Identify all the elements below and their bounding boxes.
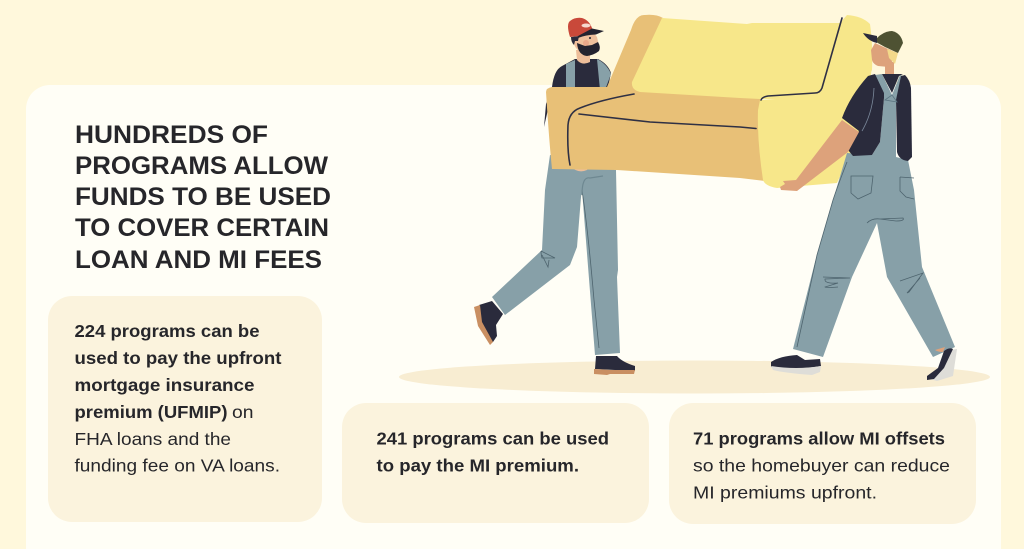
left mover trousers: [492, 155, 620, 355]
left mover hair: [571, 36, 579, 45]
left mover back boot: [479, 301, 503, 342]
title: TO COVER CERTAIN: [75, 214, 329, 242]
left mover hand: [570, 166, 590, 171]
card: 224 programs: used to pay the upfront: [74, 348, 282, 368]
right mover overalls: [793, 74, 955, 357]
right mover arm: [780, 120, 859, 191]
card: 224 programs: mortgage insurance: [74, 375, 255, 395]
card: 71 programs: so the homebuyer can reduce: [693, 456, 950, 476]
left mover overall straps: [566, 59, 611, 90]
card: 241 programs: to pay the MI premium.: [376, 456, 579, 476]
illustration: left mover: [474, 18, 635, 375]
left mover face: [574, 32, 599, 54]
left mover cap: [568, 18, 594, 37]
right mover left shoe: [771, 355, 821, 368]
sofa tan body: [546, 15, 765, 181]
title: HUNDREDS OF: [75, 121, 268, 149]
title: PROGRAMS ALLOW: [75, 152, 328, 180]
right mover cap: [876, 31, 903, 53]
sofa back cushion: [632, 15, 872, 100]
card: 71 programs: [669, 403, 976, 524]
sofa seam lines: [568, 94, 634, 165]
card: 241 programs: [342, 403, 649, 523]
card: 224 programs: [48, 296, 322, 522]
title: [75, 121, 331, 274]
card: 71 programs: 71 programs allow MI offsets: [693, 428, 945, 448]
sofa right arm: [758, 65, 872, 188]
left mover upper body: [544, 59, 611, 127]
right mover pockets and creases: [797, 162, 923, 347]
title: FUNDS TO BE USED: [75, 183, 331, 211]
card: 224 programs: FHA loans and the: [74, 429, 231, 449]
left mover neck: [576, 50, 590, 64]
right mover strap buckle: [885, 95, 897, 102]
right mover neck: [885, 62, 894, 75]
left mover front boot: [595, 356, 635, 371]
right mover hair: [887, 49, 898, 64]
illustration: sofa: [546, 15, 872, 188]
ground shadow: [399, 360, 990, 394]
card: 71 programs: MI premiums upfront.: [693, 482, 877, 502]
card: 224 programs: premium (UFMIP): [74, 402, 228, 422]
left mover beard: [577, 42, 600, 56]
right mover right shoe: [935, 347, 945, 352]
right mover shirt: [842, 74, 884, 156]
card: 224 programs: 224 programs can be: [74, 321, 260, 341]
illustration: right mover: [771, 31, 957, 381]
title: LOAN AND MI FEES: [75, 246, 322, 274]
right mover face: [871, 43, 897, 67]
card: 224 programs: on: [232, 402, 254, 422]
card: 241 programs: 241 programs can be used: [376, 428, 609, 448]
card: 224 programs: funding fee on VA loans.: [74, 456, 280, 476]
